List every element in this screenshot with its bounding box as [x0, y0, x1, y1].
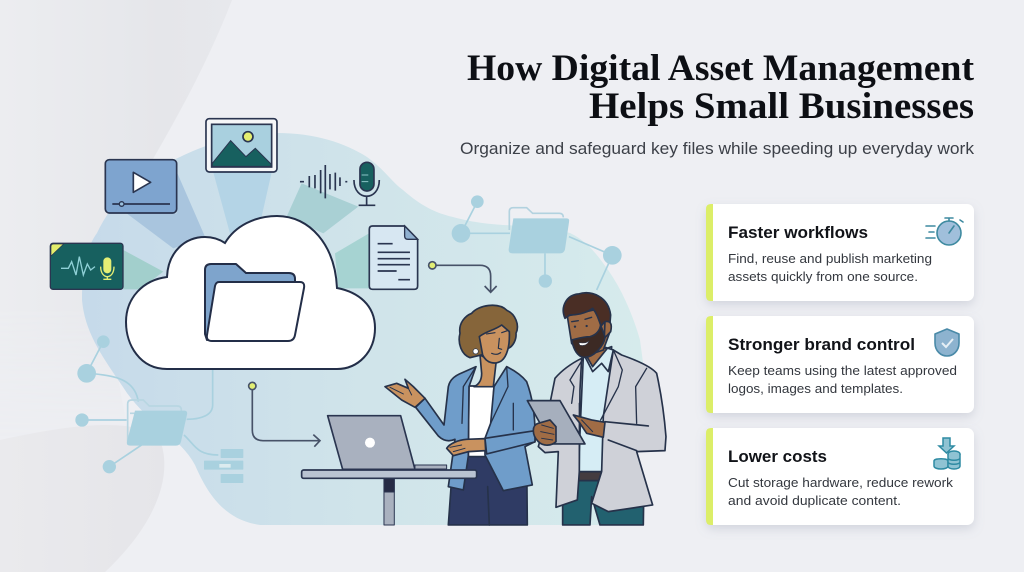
person: man — [538, 293, 666, 525]
card body: assets quickly from one source. — [728, 269, 918, 284]
card: stronger brand control — [706, 316, 974, 413]
subtitle: Organize and safeguard key files while speeding up everyday work — [460, 139, 974, 158]
card heading: Lower costs — [728, 448, 827, 466]
card body: Cut storage hardware, reduce rework — [728, 475, 954, 490]
background blob — [82, 133, 644, 525]
icon: shield — [935, 329, 959, 356]
beam: image — [213, 172, 272, 233]
title — [467, 48, 975, 127]
card body: Find, reuse and publish marketing — [728, 251, 932, 266]
beam: video — [127, 172, 205, 248]
people — [385, 293, 666, 525]
laptop and table — [302, 416, 477, 525]
title: How Digital Asset Management — [467, 48, 975, 89]
icon: coins and arrow — [934, 438, 960, 469]
icon: folder in cloud — [205, 264, 304, 341]
card: lower costs — [706, 428, 974, 525]
card heading: Faster workflows — [728, 224, 868, 242]
beam: audio — [287, 183, 358, 233]
icon: microphone with waveform — [300, 162, 379, 205]
card body — [728, 251, 932, 284]
card body: logos, images and templates. — [728, 381, 903, 396]
card body — [728, 363, 957, 396]
connector arrow: to people — [429, 262, 497, 292]
card heading: Stronger brand control — [728, 336, 915, 354]
network: upper right — [452, 195, 622, 290]
tablet — [527, 401, 585, 444]
background — [84, 0, 196, 572]
beam: document — [335, 233, 369, 288]
asset icons and beams — [50, 119, 418, 289]
card body — [728, 475, 954, 508]
connector arrow: to laptop — [249, 382, 320, 447]
icon: image card — [206, 119, 277, 172]
card body: and avoid duplicate content. — [728, 493, 901, 508]
hands — [533, 415, 605, 445]
icon: document — [369, 226, 418, 289]
card body: Keep teams using the latest approved — [728, 363, 957, 378]
icon: stopwatch — [926, 218, 963, 245]
title: Helps Small Businesses — [589, 86, 974, 127]
cloud — [126, 216, 375, 369]
icon: video player — [105, 160, 177, 213]
network: lower left — [75, 335, 243, 483]
person: woman — [385, 305, 535, 525]
beam: audio card — [123, 250, 163, 289]
card: faster workflows — [706, 204, 974, 301]
icon: audio card — [50, 243, 123, 289]
